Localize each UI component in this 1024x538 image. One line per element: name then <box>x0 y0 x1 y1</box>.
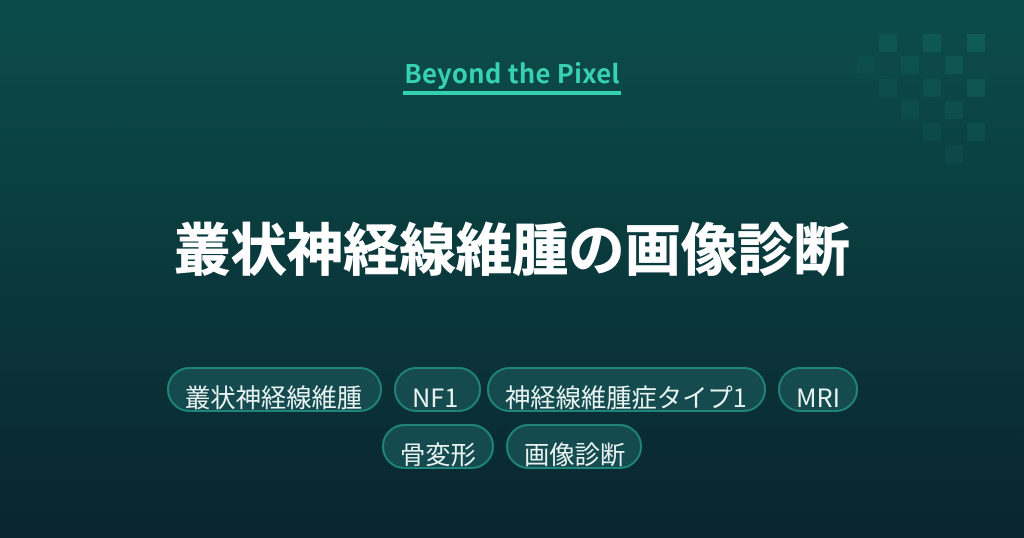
tag: 骨変形 <box>382 424 494 469</box>
tag: 画像診断: 画像診断 <box>524 436 625 472</box>
tag: 叢状神経線維腫: 叢状神経線維腫 <box>185 379 362 415</box>
brand label: Beyond the Pixel: Beyond the Pixel <box>404 54 620 91</box>
tag: MRI: MRI <box>796 379 840 415</box>
tag: 叢状神経線維腫 <box>167 367 382 412</box>
tag: 骨変形: 骨変形 <box>400 436 476 472</box>
tag: 神経線維腫症タイプ1 <box>487 367 766 412</box>
title: 叢状神経線維腫の画像診断 <box>174 206 850 287</box>
tag: 神経線維腫症タイプ1: 神経線維腫症タイプ1 <box>505 379 747 415</box>
tag: NF1 <box>394 367 481 412</box>
tag: MRI <box>778 367 858 412</box>
tag: 画像診断 <box>506 424 642 469</box>
tag: NF1: NF1 <box>412 379 458 415</box>
decorative square pattern <box>879 34 985 141</box>
